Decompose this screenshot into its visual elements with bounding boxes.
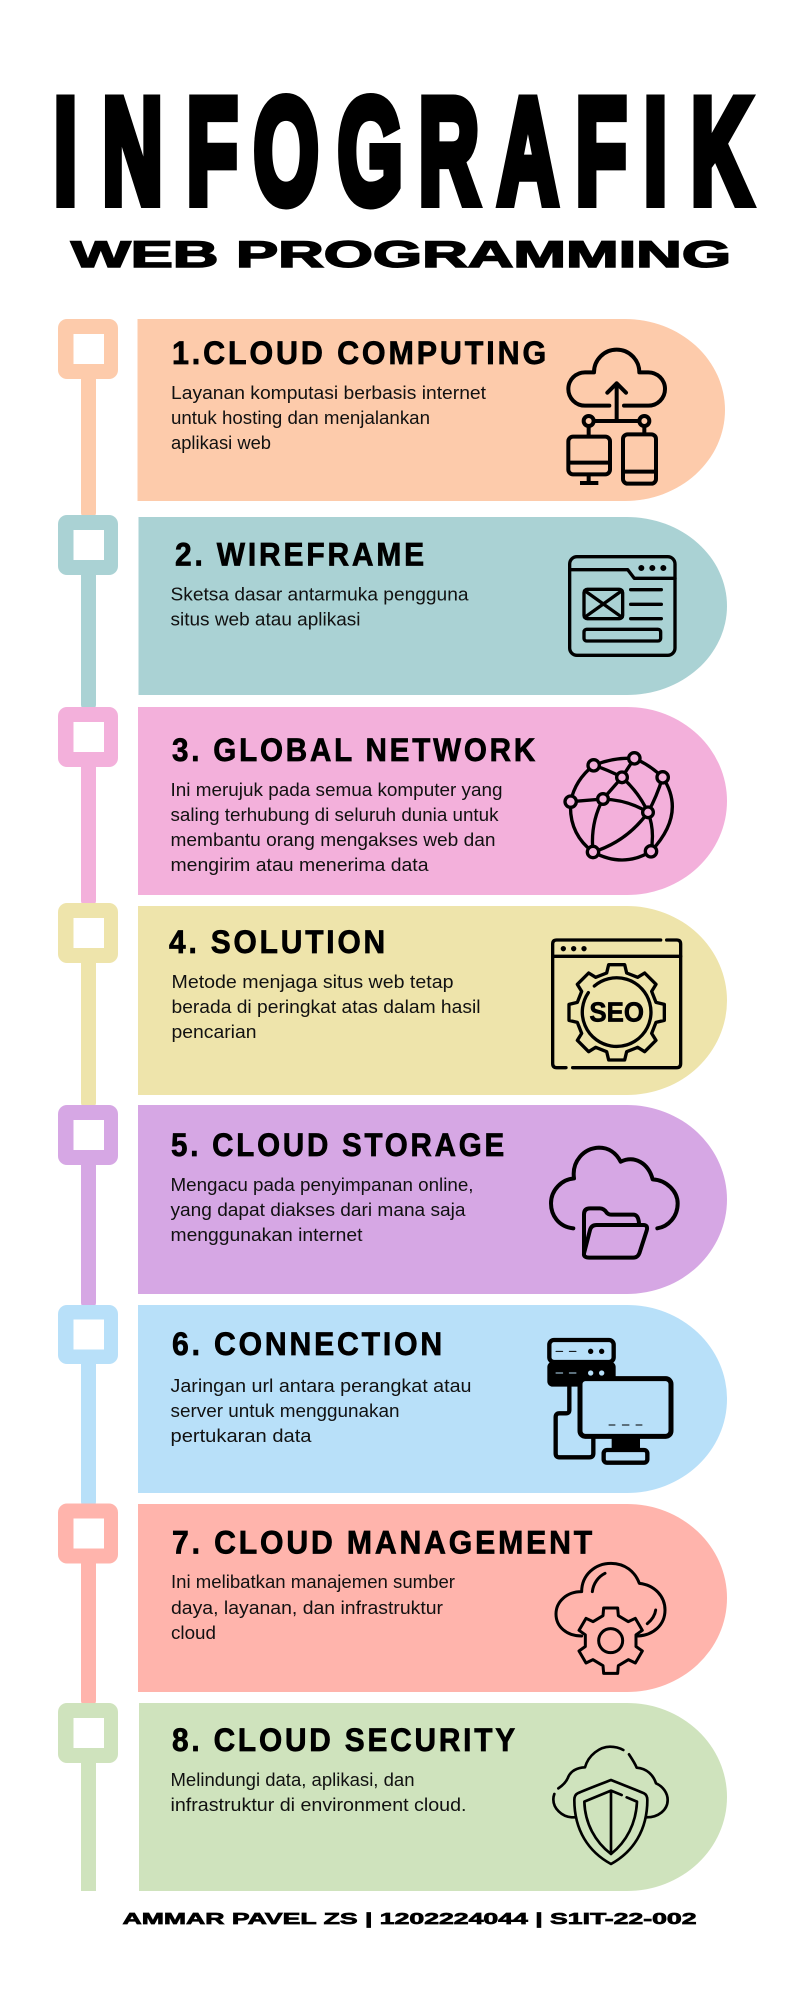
card background 2 [138,517,727,695]
timeline stem 6 [81,1360,96,1506]
card background 8 [139,1703,727,1891]
description 5 [170,1174,474,1245]
description 3: mengirim atau menerima data [170,854,429,875]
timeline marker 1 [58,319,118,379]
description 4 [172,971,480,1042]
panel: 7 cloud management [58,1504,727,1705]
description 1: aplikasi web [171,432,271,453]
description 1 [171,382,486,453]
description 1: Layanan komputasi berbasis internet [171,382,486,403]
description 1: untuk hosting dan menjalankan [171,407,430,428]
panel: 3 global network [58,707,727,905]
icon: SEO window with gear: SEO [589,997,644,1028]
title: INFOGRAFIK [54,68,751,235]
description 2: situs web atau aplikasi [170,608,360,629]
card background 3 [138,707,727,895]
panel: 1 cloud computing [58,319,725,517]
card background 7 [138,1504,727,1692]
timeline stem 7 [81,1559,96,1705]
description 5: menggunakan internet [170,1224,362,1245]
icon: cloud with devices [568,350,665,484]
description 7: Ini melibatkan manajemen sumber [171,1571,455,1592]
description 3: membantu orang mengakses web dan [170,829,496,850]
footer credit: AMMAR PAVEL ZS | 1202224044 | S1IT-22-002 [122,1911,697,1928]
description 3 [170,779,502,875]
description 3: saling terhubung di seluruh dunia untuk [170,804,499,825]
description 8: infrastruktur di environment cloud. [170,1794,467,1815]
description 6: Jaringan url antara perangkat atau [170,1375,472,1396]
heading 6: 6. CONNECTION [172,1326,445,1362]
icon: cloud with folder [551,1148,678,1258]
timeline marker 4 [58,903,118,963]
description 4: pencarian [172,1021,256,1042]
card background 5 [138,1105,727,1294]
icon: wireframe window [570,557,675,655]
description 8: Melindungi data, aplikasi, dan [170,1769,414,1790]
description 6: server untuk menggunakan [170,1400,400,1421]
description 6 [170,1375,472,1446]
description 5: yang dapat diakses dari mana saja [170,1199,466,1220]
description 5: Mengacu pada penyimpanan online, [170,1174,474,1195]
timeline marker 5 [58,1105,118,1165]
heading 8: 8. CLOUD SECURITY [172,1722,518,1758]
description 6: pertukaran data [170,1425,312,1446]
description 7 [171,1571,455,1643]
panel: 5 cloud storage [58,1105,727,1307]
description 8 [170,1769,467,1815]
description 3: Ini merujuk pada semua komputer yang [170,779,502,800]
icon: SEO window with gear [553,940,681,1068]
description 7: cloud [171,1622,216,1643]
description 2: Sketsa dasar antarmuka pengguna [170,584,469,605]
heading 7: 7. CLOUD MANAGEMENT [172,1524,595,1560]
icon: cloud with shield [553,1747,668,1864]
icon: global network [565,753,672,860]
timeline marker 7 [58,1504,118,1564]
description 7: daya, layanan, dan infrastruktur [171,1597,443,1618]
description 4: Metode menjaga situs web tetap [172,971,454,992]
description 2 [170,584,469,629]
panel: 2 wireframe [58,515,727,709]
heading 1: 1.CLOUD COMPUTING [172,335,549,371]
panel: 6 connection [58,1305,727,1506]
timeline marker 8 [58,1703,118,1763]
heading 2: 2. WIREFRAME [175,536,427,572]
timeline stem 1 [81,375,96,517]
heading 3: 3. GLOBAL NETWORK [172,732,538,768]
heading 5: 5. CLOUD STORAGE [171,1127,507,1163]
panel: 4 solution [58,903,727,1107]
panel: 8 cloud security [58,1703,727,1891]
icon: server and monitor [547,1340,671,1463]
timeline stem 4 [81,959,96,1107]
timeline stem 2 [81,571,96,709]
icon: cloud with gear [556,1563,665,1673]
timeline stem 5 [81,1161,96,1307]
timeline marker 2 [58,515,118,575]
card background 4 [138,906,727,1095]
timeline stem 3 [81,763,96,905]
description 4: berada di peringkat atas dalam hasil [172,996,480,1017]
card background 6 [138,1305,727,1493]
heading 4: 4. SOLUTION [169,924,388,960]
timeline marker 3 [58,707,118,767]
timeline stem 8 [81,1759,96,1891]
timeline marker 6 [58,1305,118,1364]
card background 1 [138,319,725,501]
subtitle: WEB PROGRAMMING [71,234,731,275]
